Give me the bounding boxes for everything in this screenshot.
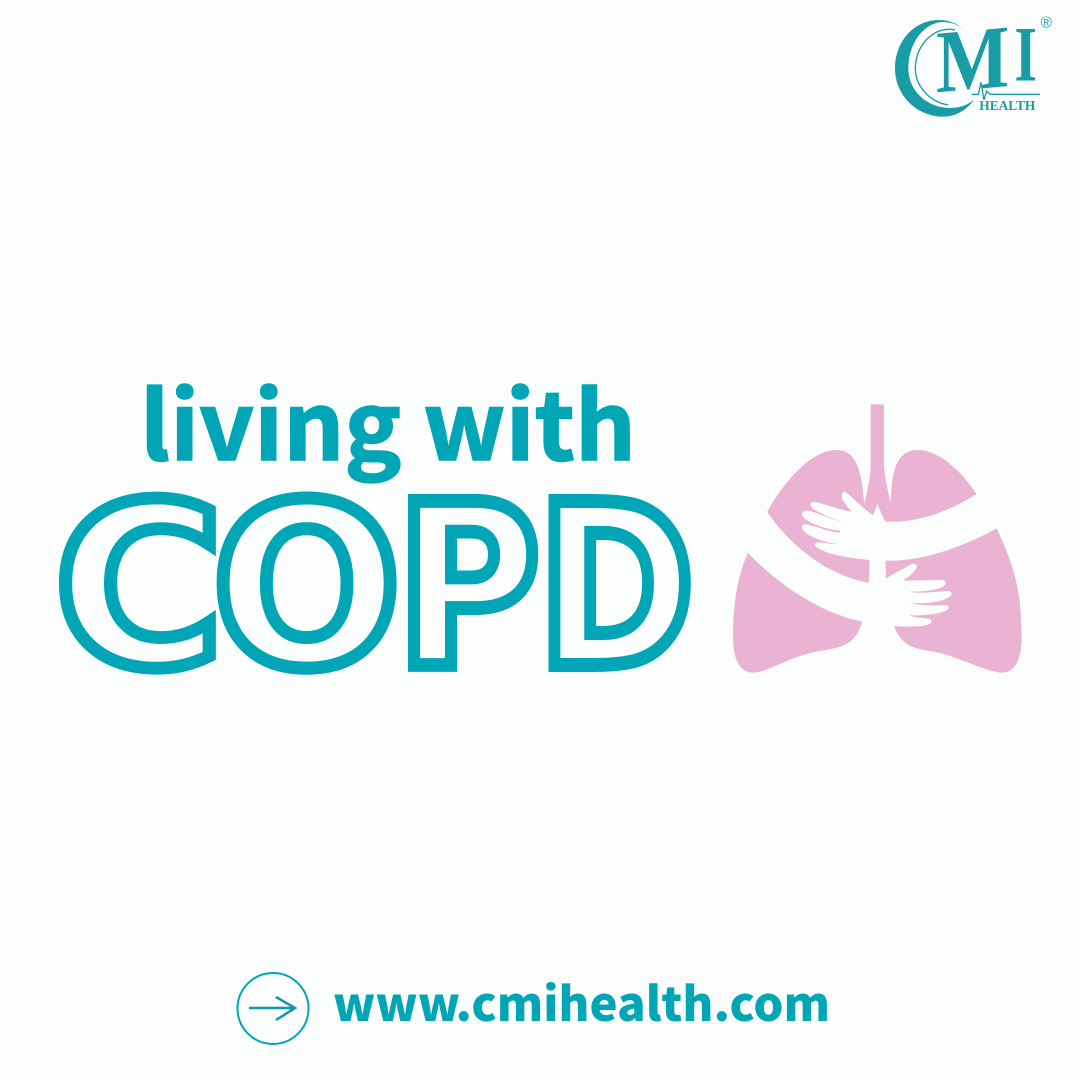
letter D: D [537,458,695,719]
logo icon: C crescent [895,20,974,117]
logo: CMI Health [895,7,1053,117]
lungs silhouette [733,404,1022,673]
circle [238,973,308,1044]
icon: arrow in circle [238,973,308,1044]
icon: lungs hugged by arms [733,404,1022,673]
heading: living with: living with [140,352,636,488]
logo heartbeat line [972,82,1040,100]
logo registered mark: ® [1041,15,1053,32]
logo letter M: M [936,7,1009,112]
logo word Health: HEALTH [979,98,1036,113]
arrow [249,997,295,1020]
letter O: O [212,456,401,718]
website url: www.cmihealth.com [333,966,830,1035]
lower arm and hand [747,510,952,643]
letter P: P [396,456,540,718]
letter C: C [54,456,224,718]
heading: COPD outlined [54,456,695,719]
logo icon: inner C line [915,29,955,105]
upper arm and hand [802,492,998,561]
logo letter I: I [1014,10,1037,97]
